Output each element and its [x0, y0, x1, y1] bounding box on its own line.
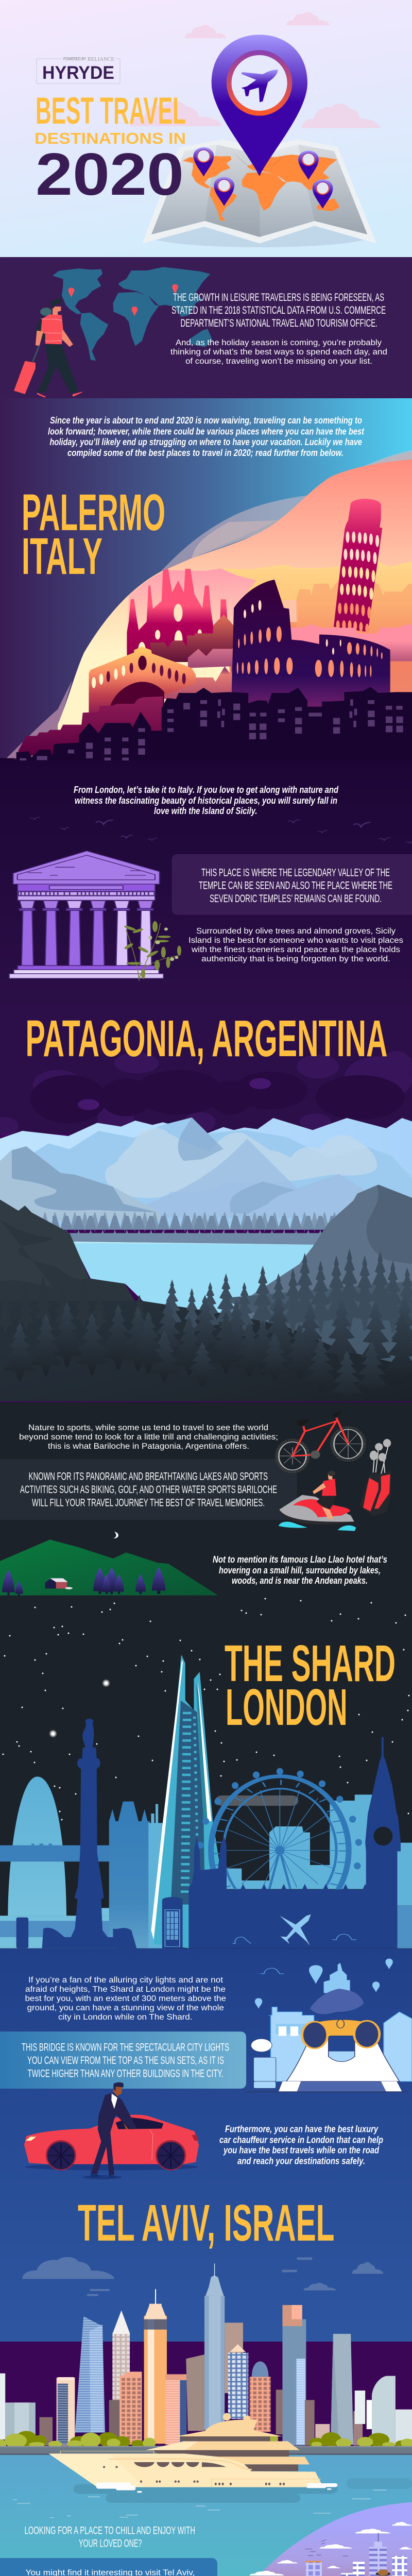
heading: Palermo Italy: PALERMO	[22, 484, 165, 541]
stars	[3, 1599, 409, 1820]
Sicily body: with the finest sceneries and peace as the place holds	[191, 945, 400, 954]
birds	[305, 2539, 348, 2556]
ripples	[13, 2490, 386, 2518]
callout: city lights: THIS BRIDGE IS KNOWN FOR THE SPECTACULAR CITY LIGHTS	[22, 2042, 229, 2054]
header illustration: clouds, map and pins	[130, 12, 380, 247]
heading: The Shard London	[225, 1635, 396, 1736]
Bariloche body: Nature to sports, while some us tend to travel to see the world	[28, 1423, 268, 1432]
icon: Greek temple	[9, 851, 163, 978]
Sicily intro: From London, let’s take it to Italy. If you love to get along with nature and	[74, 785, 339, 795]
Shard body: best for you, with an extent of 300 meters above the	[25, 1994, 226, 2003]
intro body: And, as the holiday season is coming, you’re probably	[176, 338, 382, 347]
Llao Llao paragraph: woods, and is near the Andean peaks.	[232, 1575, 368, 1586]
Bariloche body	[19, 1423, 278, 1451]
callout: sports activities	[0, 1459, 297, 1520]
car: red sports car	[24, 2115, 199, 2171]
icon: phone booth	[162, 1897, 183, 1948]
figure: chauffeur	[83, 2082, 136, 2179]
intro statement	[171, 292, 386, 329]
lead paragraph	[48, 415, 365, 458]
icon: plane	[279, 1914, 312, 1947]
London skyline	[0, 1655, 412, 1948]
mountains	[0, 1117, 412, 1230]
building: Colosseum	[231, 580, 390, 707]
Sicily body: authenticity that is being forgotten by the world.	[201, 955, 390, 963]
chauffeur paragraph: Furthermore, you can have the best luxury	[225, 2124, 379, 2134]
callout: city lights: YOU CAN VIEW FROM THE TOP AS THE SUN SETS, AS IT IS	[27, 2055, 224, 2066]
building: Leaning Tower of Pisa	[334, 499, 382, 633]
city behind traveler	[268, 1963, 412, 2081]
intro body: of course, traveling won’t be missing on your list.	[185, 357, 372, 366]
clouds	[22, 2257, 383, 2296]
Shard body: afraid of heights, The Shard at London might be the	[25, 1985, 226, 1994]
building: Rialto bridge	[89, 647, 196, 715]
heading: Palermo Italy: ITALY	[22, 528, 102, 585]
Sicily body: Surrounded by olive trees and almond groves, Sicily	[196, 927, 396, 936]
Sicily intro	[74, 785, 339, 816]
chefs upper details	[360, 2569, 393, 2576]
building: Nelson's Column	[42, 1719, 136, 1948]
heading: Palermo Italy	[22, 484, 165, 585]
logo: Hyryde top	[37, 57, 120, 83]
icons: location pins	[255, 1959, 393, 2009]
right cliff	[221, 1184, 412, 1350]
icon: crescent moon	[113, 1532, 118, 1538]
icon: suitcase and hat	[251, 2039, 276, 2081]
traveler with binoculars	[286, 1989, 400, 2081]
forest	[0, 1248, 412, 1402]
icon: jet ski rider	[279, 1471, 356, 1531]
intro body: thinking of what’s the best ways to spend each day, and	[170, 348, 387, 357]
far tree line	[40, 1212, 341, 1246]
logo: Hyryde top: RELIANCE	[88, 57, 114, 62]
callout: valley of the temple	[172, 854, 412, 915]
Sicily body: Island is the best for someone who wants to visit places	[188, 936, 403, 945]
callout: city lights: TWICE HIGHER THAN ANY OTHER BUILDINGS IN THE CITY.	[28, 2068, 224, 2080]
question heading: YOUR LOVED ONE?	[79, 2538, 142, 2550]
hill with cabin	[0, 1539, 218, 1596]
title: BEST TRAVEL	[36, 90, 186, 132]
intro body	[170, 338, 387, 366]
icon: golf bag	[360, 1439, 391, 1516]
traveler base, car and chauffeur	[24, 2081, 408, 2179]
chauffeur paragraph	[219, 2124, 383, 2166]
Shard body: If you’re a fan of the alluring city lights and are not	[28, 1976, 224, 1985]
left cliff	[0, 1199, 139, 1309]
panel: Sicily	[0, 760, 412, 1028]
foreground rooftops with windows	[0, 687, 412, 781]
logo: Hyryde top: HYRYDE	[42, 63, 114, 83]
Bariloche body: beyond some tend to look for a little trill and challenging activities;	[19, 1433, 278, 1442]
Shard body: ground, you can have a stunning view of the whole	[27, 2004, 224, 2012]
lake	[72, 1242, 317, 1315]
icons: outline clouds	[233, 1934, 356, 1974]
tree line	[0, 2431, 412, 2448]
traveler figure	[14, 298, 83, 398]
icon: bicycle	[277, 1411, 365, 1472]
yacht	[48, 2413, 337, 2493]
panel: Palermo Italy	[0, 398, 412, 781]
panel: Bariloche	[0, 1402, 412, 1948]
building: Parliament and Big Ben	[188, 1837, 368, 1948]
callout: sports activities: WILL FILL YOUR TRAVEL JOURNEY THE BEST OF TRAVEL MEMORIES.	[32, 1497, 265, 1509]
title: DESTINATIONS IN	[35, 129, 186, 147]
panel: Patagonia Argentina	[0, 1005, 412, 1402]
Bariloche body: this is what Bariloche in Patagonia, Argentina offers.	[48, 1442, 249, 1451]
globe with city and chefs	[232, 2502, 412, 2576]
chauffeur paragraph: you have the best travels while on the road	[223, 2145, 380, 2156]
Sicily intro: love with the Island of Sicily.	[154, 806, 258, 816]
chauffeur paragraph: and reach your destinations safely.	[237, 2156, 365, 2166]
buildings	[0, 2263, 412, 2446]
question heading	[25, 2524, 195, 2550]
skyline and yacht	[0, 2257, 412, 2518]
sports icons and hill scene	[0, 1411, 391, 1596]
building: The Shard	[151, 1655, 224, 1948]
temple illustration and birds	[9, 817, 412, 980]
globe city buildings	[288, 2533, 407, 2576]
icon: large location pin with plane	[212, 35, 307, 176]
scene: plane, clouds, binoculars traveler	[233, 1914, 412, 2081]
Llao Llao paragraph	[213, 1554, 387, 1586]
callout: Tel Aviv	[0, 2558, 217, 2576]
Palermo illustration	[0, 450, 412, 781]
panel: introduction	[0, 257, 412, 398]
water shadows	[74, 2484, 338, 2503]
building: Milan-style cathedral	[127, 569, 227, 658]
night clouds	[0, 1051, 412, 1136]
Shard body: city in London while on The Shard.	[58, 2013, 193, 2022]
callout: city lights	[0, 2031, 246, 2089]
title: 2020	[36, 141, 184, 208]
icons: birds	[30, 817, 412, 843]
Shard body	[25, 1976, 226, 2022]
title	[35, 90, 186, 208]
logo: Hyryde top: POWERED BY	[63, 57, 87, 61]
panel: header	[0, 0, 412, 257]
lead paragraph: compiled some of the best places to travel in 2020; read further from below.	[67, 448, 344, 458]
callout: sports activities: KNOWN FOR ITS PANORAMIC AND BREATHTAKING LAKES AND SPORTS	[29, 1471, 268, 1483]
Patagonia landscape	[0, 1051, 412, 1402]
panel: Tel Aviv	[0, 2257, 412, 2576]
question heading: LOOKING FOR A PLACE TO CHILL AND ENJOY WITH	[25, 2524, 195, 2536]
building: London Eye	[211, 1776, 349, 1925]
building: Tower Bridge	[0, 1843, 110, 1861]
icon: olive branch	[123, 921, 181, 980]
Sicily body	[188, 927, 403, 963]
panel: The Shard details	[0, 1914, 412, 2342]
world map with traveler	[14, 267, 213, 398]
Sicily intro: witness the fascinating beauty of historical places, you will surely fall in	[75, 795, 337, 806]
